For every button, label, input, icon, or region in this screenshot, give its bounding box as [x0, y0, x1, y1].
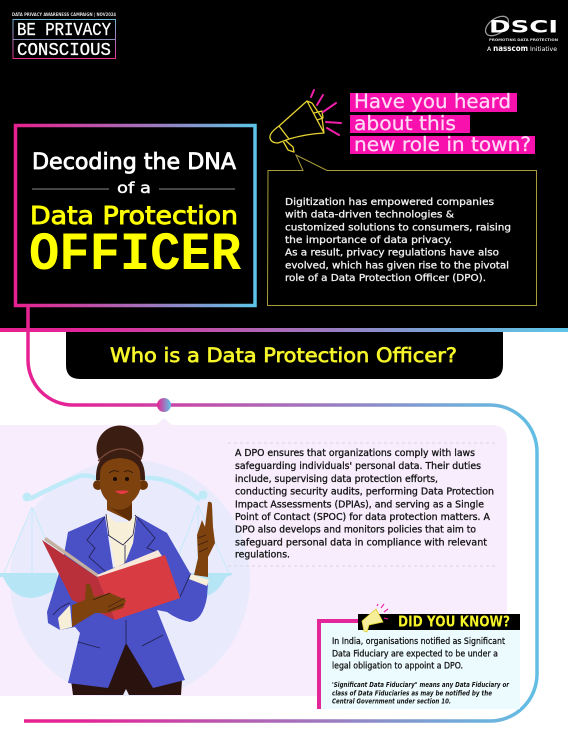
body paragraph: Point of Contact (SPOC) for data protection matters. A: [235, 512, 490, 523]
scale pan: left: [0, 573, 57, 598]
section heading: who is a DPO: [66, 332, 503, 379]
body paragraph: safeguarding individuals' personal data. Their duties: [235, 461, 481, 472]
panel: lilac content background: [0, 418, 507, 696]
DSCI logo: DSCI: [489, 18, 558, 36]
speech bubble intro: Digitization has empowered companies: [285, 197, 494, 208]
callout heading: DID YOU KNOW?: [398, 612, 510, 630]
gripping hand: [72, 584, 126, 627]
black header background: [0, 0, 568, 330]
callout header bar: [358, 614, 520, 630]
scale pan: right: [175, 573, 232, 597]
callout: did you know: Central Government under section 10.: [332, 698, 451, 706]
title panel: Data Protection: [30, 201, 238, 230]
highlighted question heading: new role in town?: [354, 133, 531, 156]
scales of justice: [4, 476, 229, 573]
speech bubble intro: with data-driven technologies &: [285, 210, 454, 220]
trousers: [71, 640, 182, 695]
speech bubble intro: the importance of data privacy.: [285, 235, 452, 246]
DSCI logo: PROMOTING DATA PROTECTION: [489, 37, 558, 42]
speech bubble intro: As a result, privacy regulations have also: [285, 248, 499, 258]
highlighted question heading: about this: [354, 112, 456, 135]
body paragraph: Impact Assessments (DPIAs), and serving as a Single: [235, 500, 484, 510]
title panel: of a: [117, 179, 151, 197]
raised hand: [194, 502, 215, 577]
timeline dot: [157, 398, 171, 412]
body paragraph: include, supervising data protection efforts,: [235, 474, 438, 485]
speech bubble intro: role of a Data Protection Officer (DPO).: [285, 273, 486, 284]
callout footnote: 'Significant Data Fiduciary" means any Data Fiduciary or: [332, 681, 510, 689]
speech bubble intro: customized solutions to consumers, raising: [285, 222, 511, 234]
title panel: OFFICER: [29, 225, 242, 286]
campaign badge: DATA PRIVACY AWARENESS CAMPAIGN | NOV2024: [12, 12, 116, 18]
body paragraph: DPO also develops and monitors policies that aim to: [235, 524, 476, 536]
callout: did you know: [319, 604, 520, 709]
DSCI logo: A nasscom Initiative: [487, 44, 557, 53]
highlighted question heading: [350, 90, 535, 156]
section heading: who is a DPO: Who is a Data Protection Officer?: [110, 344, 457, 367]
open book: [42, 540, 115, 620]
icon: megaphone: [270, 90, 341, 152]
campaign badge: CONSCIOUS: [17, 41, 111, 61]
body paragraph: conducting security audits, performing Data Protection: [235, 486, 494, 498]
campaign badge: [12, 12, 116, 61]
body paragraph: safeguard personal data in compliance with relevant: [235, 538, 487, 548]
callout: did you know: class of Data Fiduciaries as may be notified by the: [332, 690, 492, 698]
body paragraph: regulations.: [235, 550, 290, 560]
face: [93, 480, 103, 490]
illustration: woman with book and scales: [0, 426, 250, 700]
hair: [96, 426, 144, 472]
backdrop circle: [10, 460, 250, 700]
callout: did you know: legal obligation to appoint a DPO.: [332, 662, 463, 672]
jacket: [47, 515, 208, 688]
speech bubble intro: evolved, which has given rise to the pivotal: [285, 260, 509, 272]
DSCI logo: [482, 12, 558, 53]
campaign badge: BE PRIVACY: [17, 21, 111, 41]
gradient timeline line: [24, 307, 537, 721]
horizontal gradient divider: [0, 328, 568, 332]
shirt: [106, 513, 137, 568]
callout text: In India, organisations notified as Significant: [332, 637, 505, 647]
title panel: [16, 126, 255, 306]
neck: [107, 498, 132, 521]
icon: small megaphone: [362, 604, 388, 632]
highlighted question heading: Have you heard: [354, 90, 511, 113]
body paragraph: A DPO ensures that organizations comply with laws: [235, 448, 475, 459]
callout: did you know: Data Fiduciary are expected to be under a: [332, 650, 498, 660]
speech bubble intro: [268, 155, 536, 306]
body paragraph: [228, 443, 497, 566]
title panel: Decoding the DNA: [32, 150, 236, 175]
